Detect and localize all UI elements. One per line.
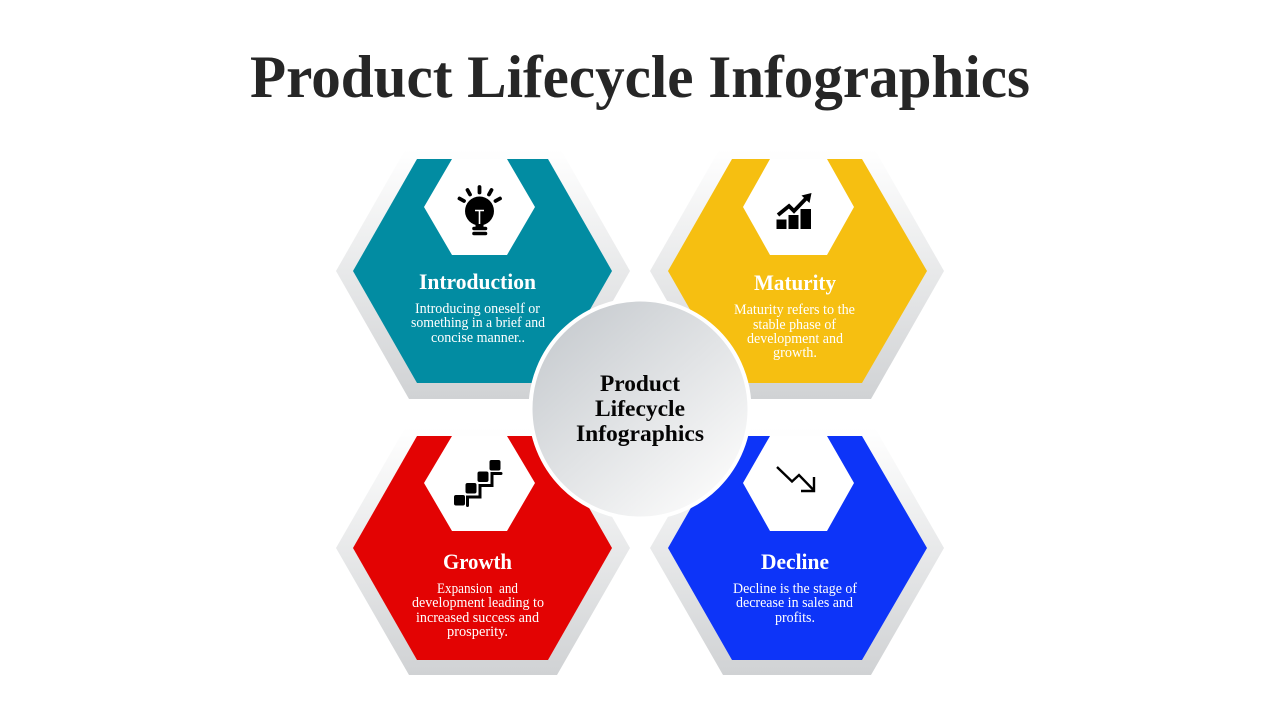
icon: stairs — [454, 460, 501, 506]
heading: introduction: Introduction — [419, 269, 536, 294]
center label: Product — [600, 371, 680, 397]
text: decline description: profits. — [775, 610, 815, 626]
text: introduction description: Introducing oneself or — [415, 301, 540, 317]
text: growth description: prosperity. — [447, 624, 508, 640]
text: introduction description — [411, 301, 546, 346]
text: maturity description: development and — [747, 331, 844, 347]
icon: rising bar chart — [776, 193, 812, 229]
text: growth description: increased success and — [416, 610, 540, 626]
center label: Infographics — [576, 421, 704, 447]
center label — [576, 371, 704, 447]
text: decline description — [733, 581, 857, 626]
text: maturity description — [734, 302, 855, 361]
heading: maturity: Maturity — [754, 270, 836, 295]
text: maturity description: stable phase of — [753, 317, 836, 333]
heading: decline: Decline — [761, 549, 829, 574]
text: introduction description: something in a brief and — [411, 315, 546, 331]
icon: falling arrow — [777, 467, 814, 491]
title: Product Lifecycle Infographics — [250, 44, 1030, 110]
text: maturity description: Maturity refers to the — [734, 302, 855, 318]
text: growth description: Expansion and — [437, 581, 519, 597]
center label: Lifecycle — [595, 396, 685, 422]
panel: introduction — [336, 150, 630, 399]
text: decline description: decrease in sales and — [736, 595, 854, 611]
heading: growth: Growth — [443, 549, 512, 574]
panel: growth — [336, 428, 630, 675]
text: maturity description: growth. — [773, 345, 817, 361]
panel: decline — [650, 428, 944, 675]
text: growth description — [412, 581, 544, 640]
icon: light bulb — [460, 187, 500, 234]
text: decline description: Decline is the stage of — [733, 581, 857, 597]
center circle — [530, 300, 750, 518]
panel: maturity — [650, 150, 944, 399]
text: growth description: development leading to — [412, 595, 544, 611]
text: introduction description: concise manner.. — [431, 330, 525, 346]
